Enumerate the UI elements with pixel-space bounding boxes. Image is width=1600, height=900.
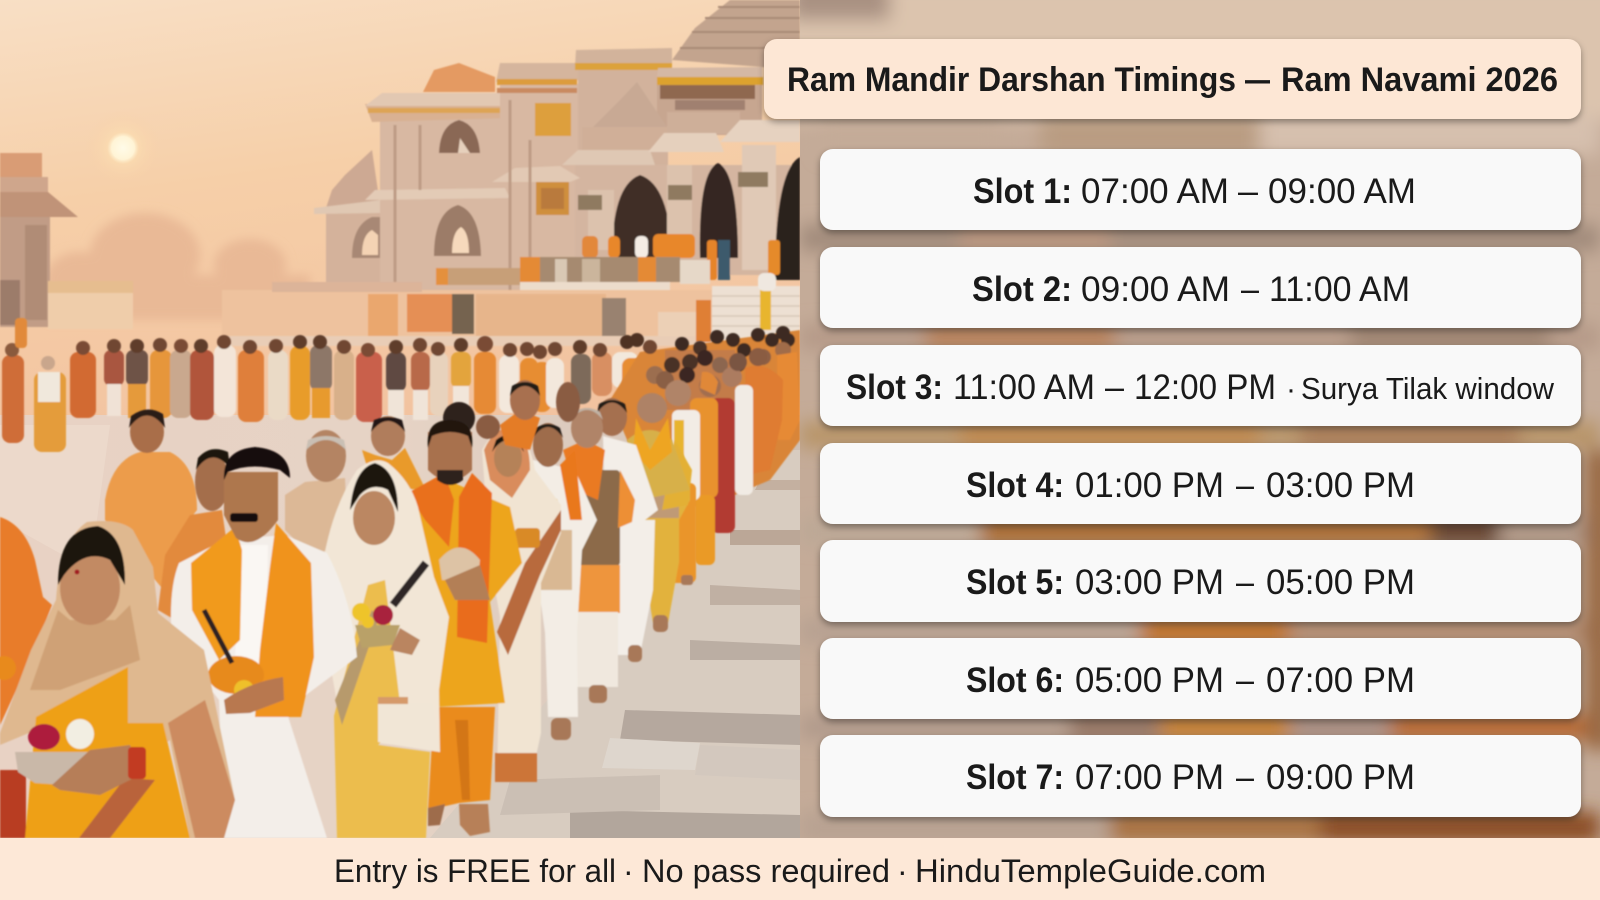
- temple: [220, 0, 800, 346]
- far figures with feet: [674, 482, 697, 584]
- slot 3 card with Surya Tilak note: –: [1105, 368, 1125, 407]
- slot 4 card: 03:00 PM: [1266, 466, 1415, 505]
- slot 7 card: [820, 735, 1581, 817]
- slot 2 card: 11:00 AM: [1269, 270, 1410, 309]
- distant queue of devotees: [2, 318, 656, 452]
- slot 5 card: 05:00 PM: [1266, 563, 1415, 602]
- man in white with beige vest: [533, 460, 597, 717]
- sun: [108, 132, 138, 164]
- slot 7 card: 07:00 PM: [1075, 758, 1224, 797]
- footer bar: HinduTempleGuide.com: [915, 853, 1266, 889]
- slot 6 card: 07:00 PM: [1266, 661, 1415, 700]
- footer bar: ·: [623, 853, 634, 889]
- photo: devotees queuing at Ram Mandir at sunrise: [0, 0, 800, 840]
- slot 4 card: 01:00 PM: [1075, 466, 1224, 505]
- gold wall panels: [535, 103, 571, 136]
- woman in cream veil: [321, 460, 449, 752]
- footer bar: No pass required: [642, 853, 890, 889]
- slot 1 card: 07:00 AM: [1081, 172, 1229, 211]
- back row men: [105, 452, 197, 600]
- tower: [672, 0, 800, 70]
- slot 4 card: –: [1236, 466, 1254, 505]
- slot 6 card: Slot 6:: [966, 661, 1064, 700]
- slot 1 card: [820, 149, 1581, 230]
- blurred photo backdrop on right: [780, 0, 1600, 842]
- slot 3 card with Surya Tilak note: ·: [1286, 373, 1296, 406]
- terrace festoons: [436, 268, 520, 285]
- slot 6 card: –: [1236, 661, 1254, 700]
- steps: [712, 286, 800, 344]
- woman in cream saree: [482, 428, 561, 782]
- foreground queue of devotees: [0, 380, 696, 838]
- orange and white figures on right side: [777, 352, 800, 440]
- devotees on upper terrace: [582, 236, 598, 258]
- slot 1 card: 09:00 AM: [1268, 172, 1416, 211]
- slot 2 card: 09:00 AM: [1081, 270, 1230, 309]
- hazy trees: [45, 213, 310, 320]
- slot 7 card: Slot 7:: [966, 758, 1064, 797]
- sky: [0, 0, 800, 440]
- title banner: Ram Mandir Darshan Timings: [787, 61, 1236, 99]
- footer bar: Entry is FREE for all: [334, 853, 616, 889]
- slot 2 card: [820, 247, 1581, 328]
- slot 6 card: [820, 638, 1581, 719]
- slot 5 card: [820, 540, 1581, 622]
- title banner: Ram Navami 2026: [1281, 61, 1558, 99]
- slot 3 card with Surya Tilak note: Slot 3:: [846, 368, 943, 407]
- footer bar: [0, 838, 1600, 900]
- slot 7 card: –: [1236, 758, 1254, 797]
- marble courtyard floor: [0, 415, 800, 840]
- slot 2 card: Slot 2:: [972, 270, 1072, 309]
- man with yellow kurta and orange scarf: [408, 483, 522, 707]
- man in white kurta with orange stole: [171, 535, 357, 838]
- slot 5 card: –: [1236, 563, 1254, 602]
- slot 2 card: –: [1241, 270, 1259, 309]
- slot 3 card with Surya Tilak note: 12:00 PM: [1134, 368, 1276, 407]
- left edge woman with orange veil: [0, 517, 52, 725]
- slot 7 card: 09:00 PM: [1266, 758, 1415, 797]
- left pavilion: [0, 153, 133, 329]
- slot 5 card: 03:00 PM: [1075, 563, 1224, 602]
- dense queue bend with many heads: [610, 326, 800, 565]
- slot 6 card: 05:00 PM: [1075, 661, 1224, 700]
- slot 1 card: Slot 1:: [973, 172, 1072, 211]
- title banner: [764, 39, 1581, 119]
- slot 4 card: [820, 443, 1581, 524]
- main masses: [326, 208, 386, 288]
- slot 5 card: Slot 5:: [966, 563, 1064, 602]
- slot 3 card with Surya Tilak note: Surya Tilak window: [1301, 371, 1555, 406]
- slot 4 card: Slot 4:: [966, 466, 1064, 505]
- arches: [439, 120, 480, 153]
- terrace wall: [223, 290, 710, 334]
- woman with offering bowl: [0, 521, 235, 838]
- footer bar: ·: [897, 853, 908, 889]
- slot 1 card: –: [1238, 172, 1259, 211]
- slot 3 card with Surya Tilak note: [820, 345, 1581, 426]
- title banner: —: [1245, 61, 1270, 99]
- slot 3 card with Surya Tilak note: 11:00 AM: [953, 368, 1095, 407]
